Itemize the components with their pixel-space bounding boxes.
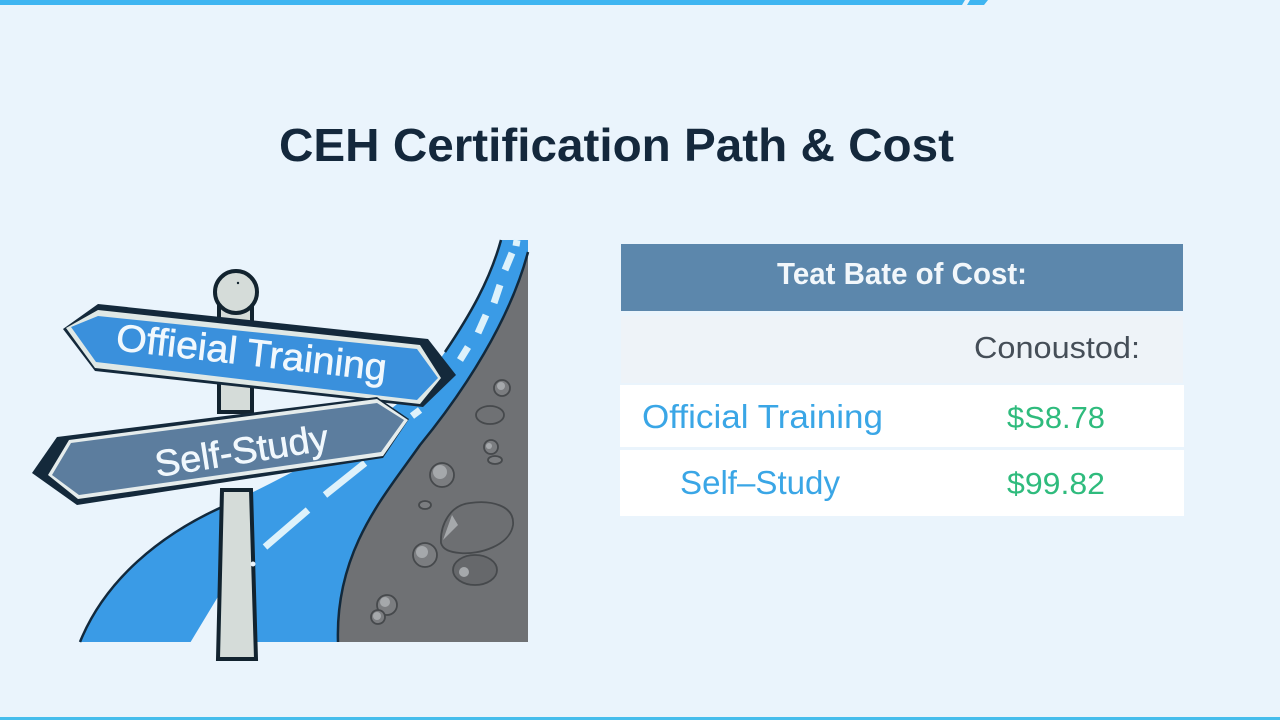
cost table bbox=[620, 244, 1184, 516]
top accent bar bbox=[0, 0, 988, 5]
light gap beside pole bbox=[254, 476, 276, 488]
small road dot bbox=[250, 562, 256, 566]
row: Official Training bbox=[620, 385, 1184, 447]
table sub-header row: Conoustod: bbox=[974, 330, 1140, 365]
table header bbox=[621, 244, 1183, 311]
rocky hillside bbox=[338, 246, 528, 642]
road edge lines bbox=[80, 240, 528, 642]
row: Self-Study: Self–Study bbox=[680, 464, 840, 501]
row: Self-Study: $99.82 bbox=[1007, 466, 1105, 501]
bottom accent bar bbox=[0, 717, 1280, 720]
table sub-header row bbox=[621, 316, 1183, 383]
row: Self-Study bbox=[620, 450, 1184, 516]
rock highlights bbox=[373, 382, 505, 620]
sign: Self-Study bbox=[32, 397, 409, 505]
row: Official Training: $S8.78 bbox=[1007, 400, 1105, 435]
sign: Official Training bbox=[63, 304, 456, 407]
row: Official Training: Official Training bbox=[642, 398, 883, 435]
signpost pole bbox=[218, 305, 256, 659]
rocks bbox=[371, 380, 513, 624]
sign: Official Training: Offieial Training bbox=[114, 317, 389, 390]
title: CEH Certification Path & Cost bbox=[279, 119, 954, 171]
signpost ball cap bbox=[215, 271, 257, 313]
road bbox=[80, 240, 528, 642]
table header: Teat Bate of Cost: bbox=[777, 256, 1027, 291]
sign: Self-Study: Self-Study bbox=[152, 417, 332, 485]
road centre dashes bbox=[265, 240, 517, 547]
illustration: signpost and road bbox=[32, 240, 528, 659]
road bottom light wedge bbox=[190, 590, 222, 643]
